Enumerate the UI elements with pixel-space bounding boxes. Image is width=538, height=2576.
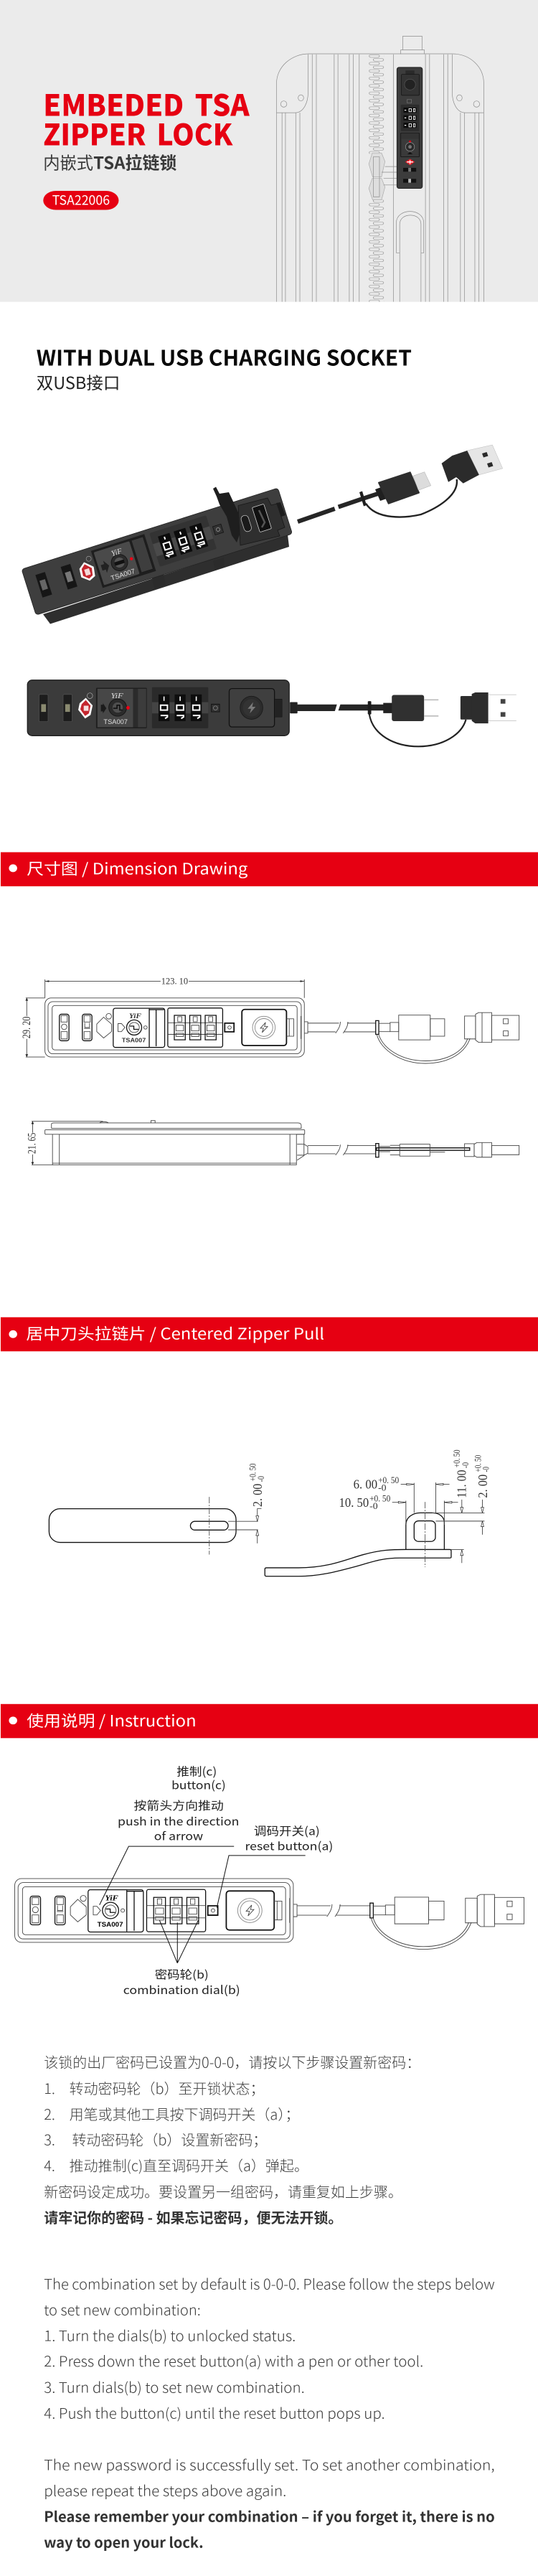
product photo: front lock with closed cover: [27, 680, 516, 746]
dimension drawing: side view: [26, 1121, 519, 1165]
dimension drawing: top view: TSA007: [122, 1038, 146, 1044]
chinese instructions: 2.: [44, 2103, 55, 2124]
product photo: angled lock with open port cover: [22, 445, 503, 624]
side view tolerances: 2. 00: [476, 1475, 491, 1498]
angled lock controls: TSA007: [110, 568, 136, 583]
side view tolerances: -0: [369, 1502, 378, 1511]
side view tolerances: +0. 50: [378, 1476, 399, 1485]
subtitle: 内嵌式: [43, 150, 93, 174]
chinese instructions: 新密码设定成功。要设置另一组密码，请重复如上步骤。: [44, 2181, 402, 2201]
callout: button c: of arrow: [154, 1827, 203, 1843]
section bar: centered zipper pull: 居中刀头拉链片 / Centered Zipper Pull: [26, 1321, 324, 1344]
side view tolerances: 6. 00: [354, 1477, 377, 1492]
english instructions: way to open your lock.: [44, 2531, 204, 2552]
flat view tolerance: -0: [257, 1476, 266, 1482]
chinese instructions: 1.: [44, 2077, 55, 2098]
callout: combination dial b: [123, 1965, 240, 1998]
english instructions: [44, 2273, 495, 2552]
chinese instructions: 转动密码轮（b）设置新密码；: [72, 2129, 267, 2150]
front cable and connectors: [290, 702, 298, 713]
flat view tolerance: +0. 50: [249, 1464, 258, 1481]
section bar: dimension drawing: [1, 852, 538, 886]
port cover flap: [213, 486, 240, 542]
subtitle: [43, 150, 176, 174]
title: EMBEDED TSA: [43, 82, 250, 124]
title: [43, 82, 250, 154]
chinese instructions: 转动密码轮（b）至开锁状态；: [70, 2077, 264, 2098]
chinese instructions: 4.: [44, 2155, 55, 2176]
english instructions: Please remember your combination – if you forget it, there is no: [44, 2505, 495, 2526]
flat view tolerance: [249, 1464, 266, 1507]
callout leaders: [100, 1846, 306, 1963]
side view tolerances: [339, 1449, 491, 1511]
side view tolerances: -0: [461, 1462, 471, 1468]
product photo: front lock with closed cover: TSA007: [103, 718, 128, 725]
dimension drawing: top view: YiF: [129, 1012, 141, 1020]
dimension drawing: side view: 21. 65: [26, 1132, 38, 1154]
dimension drawing: top view: [20, 976, 519, 1063]
side view tolerances: +0. 50: [369, 1494, 390, 1504]
side view tolerances: 10. 50: [339, 1495, 369, 1510]
callout: button c: 按箭头方向推动: [134, 1796, 224, 1813]
side view tolerances: +0. 50: [453, 1449, 462, 1467]
callout: combination dial b: 密码轮(b): [155, 1965, 209, 1982]
callout: reset button a: [245, 1822, 333, 1853]
chinese instructions: 用笔或其他工具按下调码开关（a）；: [70, 2103, 299, 2124]
side view tolerances: 11. 00: [455, 1470, 469, 1498]
side view tolerances: -0: [378, 1483, 387, 1493]
section bar: instruction: [1, 1704, 538, 1738]
zipper teeth: [369, 55, 384, 302]
hero panel: [0, 0, 538, 302]
suitcase line drawing: [277, 36, 483, 302]
zipper pull: flat view: [49, 1464, 266, 1554]
subtitle: TSA拉链锁: [93, 150, 176, 174]
side view tolerances: +0. 50: [474, 1455, 483, 1472]
angled lock controls: YiF: [110, 547, 123, 558]
english instructions: to set new combination:: [44, 2298, 201, 2319]
chinese instructions: 推动推制(c)直至调码开关（a）弹起。: [70, 2155, 308, 2176]
english instructions: 3. Turn dials(b) to set new combination.: [44, 2377, 305, 2397]
callout: reset button a: 调码开关(a): [254, 1822, 320, 1838]
instruction diagram: TSA007: [98, 1920, 123, 1928]
usb heading: [37, 342, 412, 394]
product photo: front lock with closed cover: YiF: [110, 692, 123, 700]
flat view tolerance: 2. 00: [251, 1483, 265, 1507]
zipper pulls: [369, 153, 397, 200]
lock in suitcase: [397, 67, 423, 188]
angled lock controls: [22, 488, 293, 615]
callout: reset button a: reset button(a): [245, 1837, 333, 1853]
open port recess: [238, 498, 285, 545]
instruction diagram: YiF: [105, 1894, 118, 1902]
section bar: instruction: 使用说明 / Instruction: [27, 1708, 197, 1731]
zipper pull: side view: [265, 1449, 491, 1576]
callout: button c: 推制(c): [176, 1762, 217, 1779]
width dimension: 123. 10: [161, 976, 188, 986]
callout: button c: push in the direction: [118, 1812, 239, 1829]
english instructions: please repeat the steps above again.: [44, 2480, 286, 2501]
title: ZIPPER LOCK: [43, 111, 233, 154]
english instructions: 2. Press down the reset button(a) with a pen or other tool.: [44, 2350, 423, 2371]
model badge: TSA22006: [52, 190, 110, 209]
chinese instructions: 3.: [44, 2129, 55, 2150]
english instructions: The new password is successfully set. To set another combination,: [44, 2454, 495, 2475]
instruction diagram: [15, 1762, 524, 1998]
usb heading: 双USB接口: [37, 370, 120, 394]
callout: button c: button(c): [171, 1776, 226, 1792]
chinese instructions: [44, 2051, 420, 2227]
callout: button c: [118, 1762, 239, 1843]
angled cable and connectors: [298, 493, 380, 522]
height dimension: 29. 20: [20, 1016, 33, 1038]
chinese instructions: 该锁的出厂密码已设置为0-0-0，请按以下步骤设置新密码：: [44, 2051, 420, 2072]
section bar: centered zipper pull: [1, 1317, 538, 1351]
english instructions: 1. Turn the dials(b) to unlocked status.: [44, 2324, 296, 2345]
usb heading: WITH DUAL USB CHARGING SOCKET: [37, 342, 412, 372]
section bar: dimension drawing: 尺寸图 / Dimension Drawing: [27, 856, 248, 879]
english instructions: 4. Push the button(c) until the reset button pops up.: [44, 2402, 385, 2422]
side view tolerances: -0: [482, 1467, 491, 1472]
callout: combination dial b: combination dial(b): [123, 1980, 240, 1998]
english instructions: The combination set by default is 0-0-0. Please follow the steps below: [44, 2273, 495, 2294]
chinese instructions: 请牢记你的密码 - 如果忘记密码，便无法开锁。: [44, 2206, 342, 2227]
